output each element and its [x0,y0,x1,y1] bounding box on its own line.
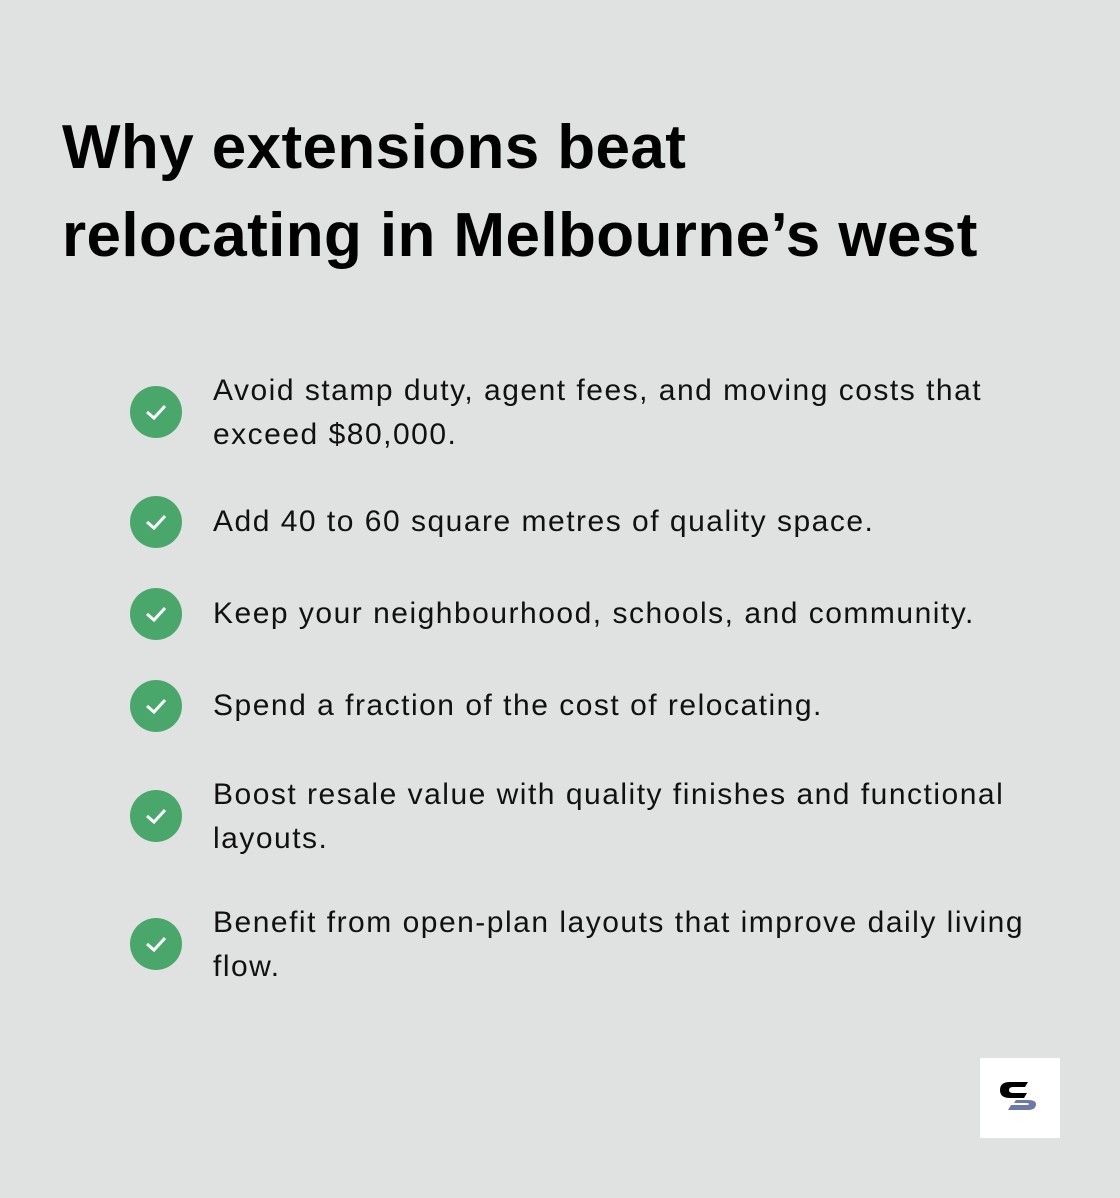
text [213,374,982,451]
text [213,906,1024,983]
title: relocating in Melbourne’s west [62,201,978,270]
text: layouts. [213,822,328,855]
text: Spend a fraction of the cost of relocating. [213,689,823,722]
item 5 [130,778,1004,855]
item 3 [130,588,975,640]
text: exceed $80,000. [213,418,457,451]
text: Add 40 to 60 square metres of quality space. [213,505,874,538]
text: flow. [213,950,281,983]
item 4 [130,680,823,732]
icon: check [130,386,182,438]
icon: check [130,918,182,970]
text [213,778,1004,855]
logo [980,1058,1060,1138]
icon: check [130,588,182,640]
text: Avoid stamp duty, agent fees, and moving costs that [213,374,982,407]
item 6 [130,906,1024,983]
item 1 [130,374,982,451]
icon: check [130,790,182,842]
icon: check [130,680,182,732]
icon: check [130,496,182,548]
title: Why extensions beat [62,113,686,182]
item 2 [130,496,874,548]
text: Boost resale value with quality finishes and functional [213,778,1004,811]
text: Benefit from open-plan layouts that improve daily living [213,906,1024,939]
text: Keep your neighbourhood, schools, and community. [213,597,975,630]
title [62,113,978,270]
